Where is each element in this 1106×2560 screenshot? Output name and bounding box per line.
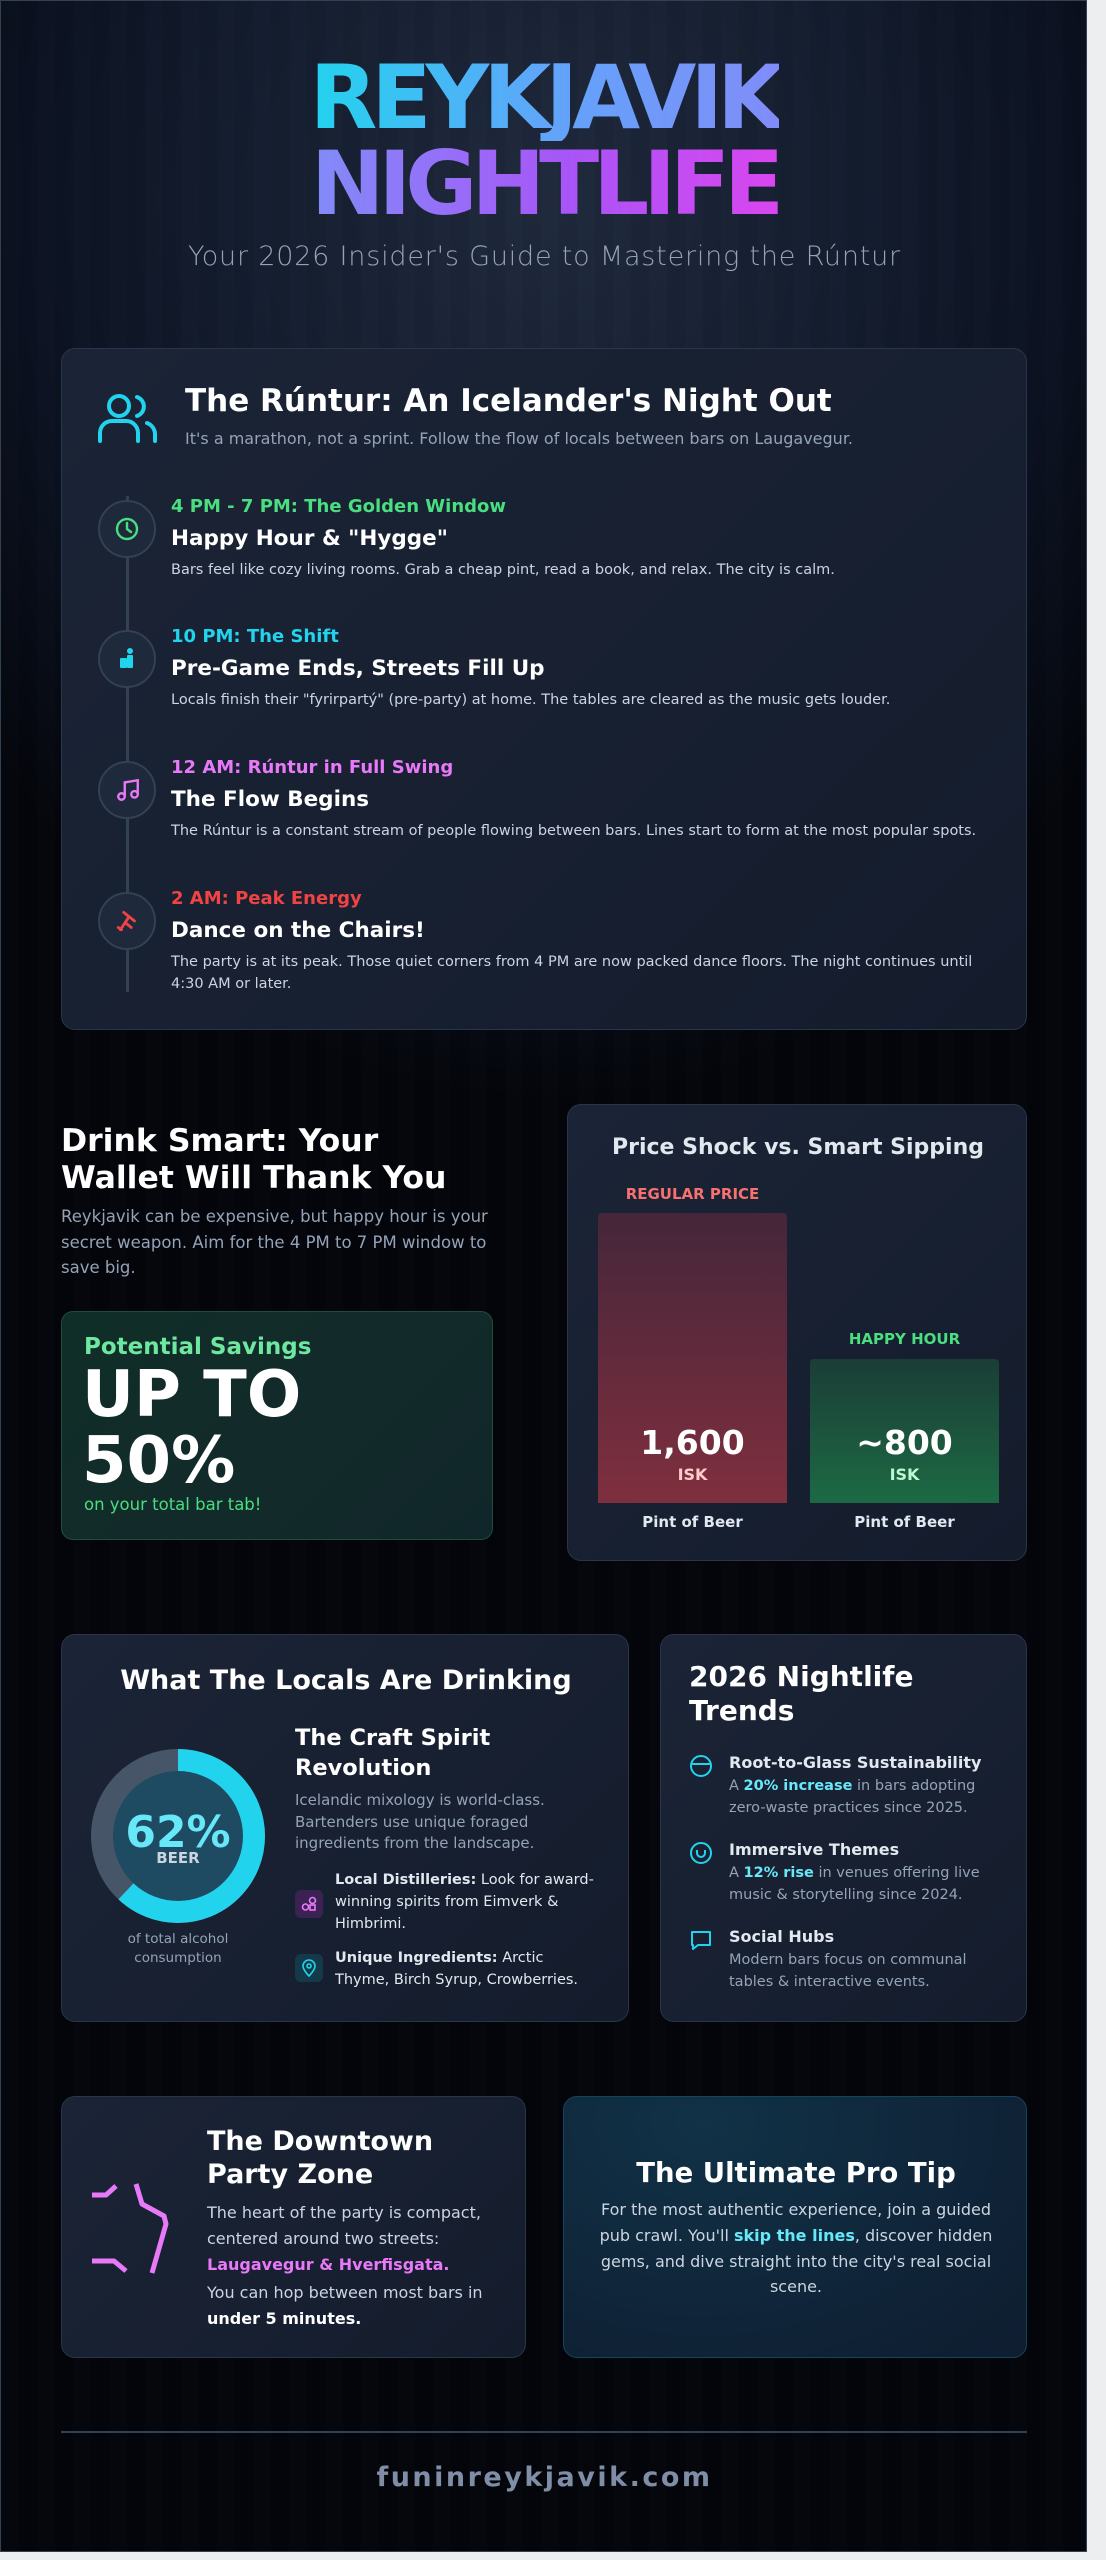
bar: regular price: 1,600	[640, 1423, 745, 1462]
timeline line	[126, 496, 129, 992]
panel: runtur timeline	[61, 348, 1027, 1030]
panel: locals drinking: What The Locals Are Drinking	[120, 1665, 572, 1696]
trend 3: Modern bars focus on communal tables & interactive events.	[729, 1952, 967, 1990]
text: drink smart paragraph: Reykjavik can be expensive, but happy hour is your secret weapon. Aim for the 4 PM to 7 PM window to save big.	[61, 1207, 488, 1277]
panel: pro tip: For the most authentic experience, join a guided pub crawl. You'll skip the lines, discover hidden gems, and dive straight into the city's real social scene.	[600, 2200, 992, 2296]
bar: regular price: REGULAR PRICE	[626, 1185, 759, 1203]
heading: drink smart	[61, 1123, 446, 1196]
subtitle: Your 2026 Insider's Guide to Mastering the Rúntur	[188, 241, 901, 272]
trend 1	[690, 1753, 982, 1816]
panel: potential savings: Potential Savings	[84, 1334, 311, 1360]
timeline item 3: The Rúntur is a constant stream of people flowing between bars. Lines start to form at the most popular spots.	[171, 823, 976, 839]
timeline item 3: The Flow Begins	[171, 787, 369, 812]
timeline item 1: 4 PM - 7 PM: The Golden Window	[171, 496, 506, 517]
trend 2	[690, 1840, 980, 1903]
icon: people	[98, 394, 157, 443]
panel: trends: Trends	[689, 1694, 794, 1727]
bar: regular price: Pint of Beer	[642, 1513, 743, 1531]
panel: potential savings	[61, 1311, 493, 1540]
panel: pro tip	[563, 2096, 1027, 2358]
text: craft spirit: Revolution	[295, 1755, 431, 1781]
subheading: It's a marathon, not a sprint. Follow the flow of locals between bars on Laugavegur.	[185, 429, 853, 448]
panel: downtown party zone: The heart of the party is compact, centered around two streets: Laugavegur & Hverfisgata.	[207, 2203, 481, 2274]
timeline item 2: Pre-Game Ends, Streets Fill Up	[171, 656, 545, 681]
timeline item 4: The party is at its peak. Those quiet corners from 4 PM are now packed dance floors. The night continues until 4:30 AM or later.	[171, 954, 972, 992]
panel: potential savings: 50%	[82, 1424, 235, 1498]
timeline item 4	[98, 888, 972, 992]
heading: drink smart: Wallet Will Thank You	[61, 1160, 446, 1196]
panel: trends	[660, 1634, 1027, 2022]
timeline item 1: Bars feel like cozy living rooms. Grab a cheap pint, read a book, and relax. The city is calm.	[171, 562, 835, 578]
title: REYKJAVIK	[310, 46, 779, 149]
text: craft spirit: The Craft Spirit	[295, 1725, 490, 1751]
timeline item 2: Locals finish their "fyrirpartý" (pre-party) at home. The tables are cleared as the music gets louder.	[171, 692, 890, 708]
timeline item 2	[98, 626, 890, 708]
icon: map	[92, 2183, 168, 2274]
panel: downtown party zone: Party Zone	[207, 2159, 373, 2190]
timeline item 3	[98, 757, 976, 839]
panel: price chart: Price Shock vs. Smart Sipping	[612, 1135, 984, 1160]
panel: potential savings: UP TO	[82, 1358, 301, 1432]
trend 3: Social Hubs	[729, 1927, 834, 1946]
footer: funinreykjavik.com	[376, 2462, 713, 2493]
panel: downtown party zone: The Downtown	[207, 2126, 433, 2157]
timeline item 4: Dance on the Chairs!	[171, 918, 425, 943]
timeline item 2: 10 PM: The Shift	[171, 626, 339, 647]
panel: locals drinking	[61, 1634, 629, 2022]
bullet: distilleries: Local Distilleries: Look for award-winning spirits from Eimverk & Himbrimi.	[335, 1872, 594, 1932]
donut chart	[91, 1749, 265, 1966]
bar: regular price	[598, 1185, 787, 1531]
panel: locals drinking: Icelandic mixology is world-class. Bartenders use unique foraged ingredients from the landscape.	[295, 1791, 545, 1852]
heading: drink smart: Drink Smart: Your	[61, 1123, 378, 1159]
timeline item 4: 2 AM: Peak Energy	[171, 888, 362, 909]
trend 1: A 20% increase in bars adopting zero-waste practices since 2025.	[729, 1778, 975, 1816]
trend 2: Immersive Themes	[729, 1840, 899, 1859]
bar: regular price: ISK	[678, 1465, 707, 1484]
heading: The Rúntur: An Icelander's Night Out	[185, 383, 832, 419]
bar: happy hour: Pint of Beer	[854, 1513, 955, 1531]
panel: downtown party zone: You can hop between most bars in under 5 minutes.	[207, 2283, 483, 2328]
bar: happy hour: ~800	[856, 1423, 953, 1462]
panel: downtown party zone	[61, 2096, 526, 2358]
donut chart: 62%	[125, 1807, 231, 1858]
bar: happy hour: HAPPY HOUR	[849, 1330, 960, 1348]
trend 3	[691, 1927, 967, 1990]
bullet: ingredients: Unique Ingredients: Arctic Thyme, Birch Syrup, Crowberries.	[335, 1950, 578, 1988]
title	[310, 46, 779, 235]
donut chart: consumption	[134, 1950, 222, 1966]
timeline item 3: 12 AM: Rúntur in Full Swing	[171, 757, 453, 778]
text: craft spirit	[295, 1725, 490, 1781]
panel: trends: 2026 Nightlife	[689, 1660, 913, 1693]
trend 2: A 12% rise in venues offering live music & storytelling since 2024.	[729, 1865, 980, 1903]
timeline item 1: Happy Hour & "Hygge"	[171, 526, 448, 551]
panel: potential savings: on your total bar tab!	[84, 1495, 261, 1514]
panel: price chart	[567, 1104, 1027, 1561]
panel: pro tip: The Ultimate Pro Tip	[636, 2157, 956, 2189]
donut chart: of total alcohol	[128, 1931, 228, 1947]
donut chart: BEER	[156, 1849, 200, 1867]
timeline item 1	[98, 496, 835, 578]
bar: happy hour: ISK	[890, 1465, 919, 1484]
trend 1: Root-to-Glass Sustainability	[729, 1753, 981, 1772]
bar: happy hour	[810, 1330, 999, 1531]
title: NIGHTLIFE	[311, 132, 778, 235]
